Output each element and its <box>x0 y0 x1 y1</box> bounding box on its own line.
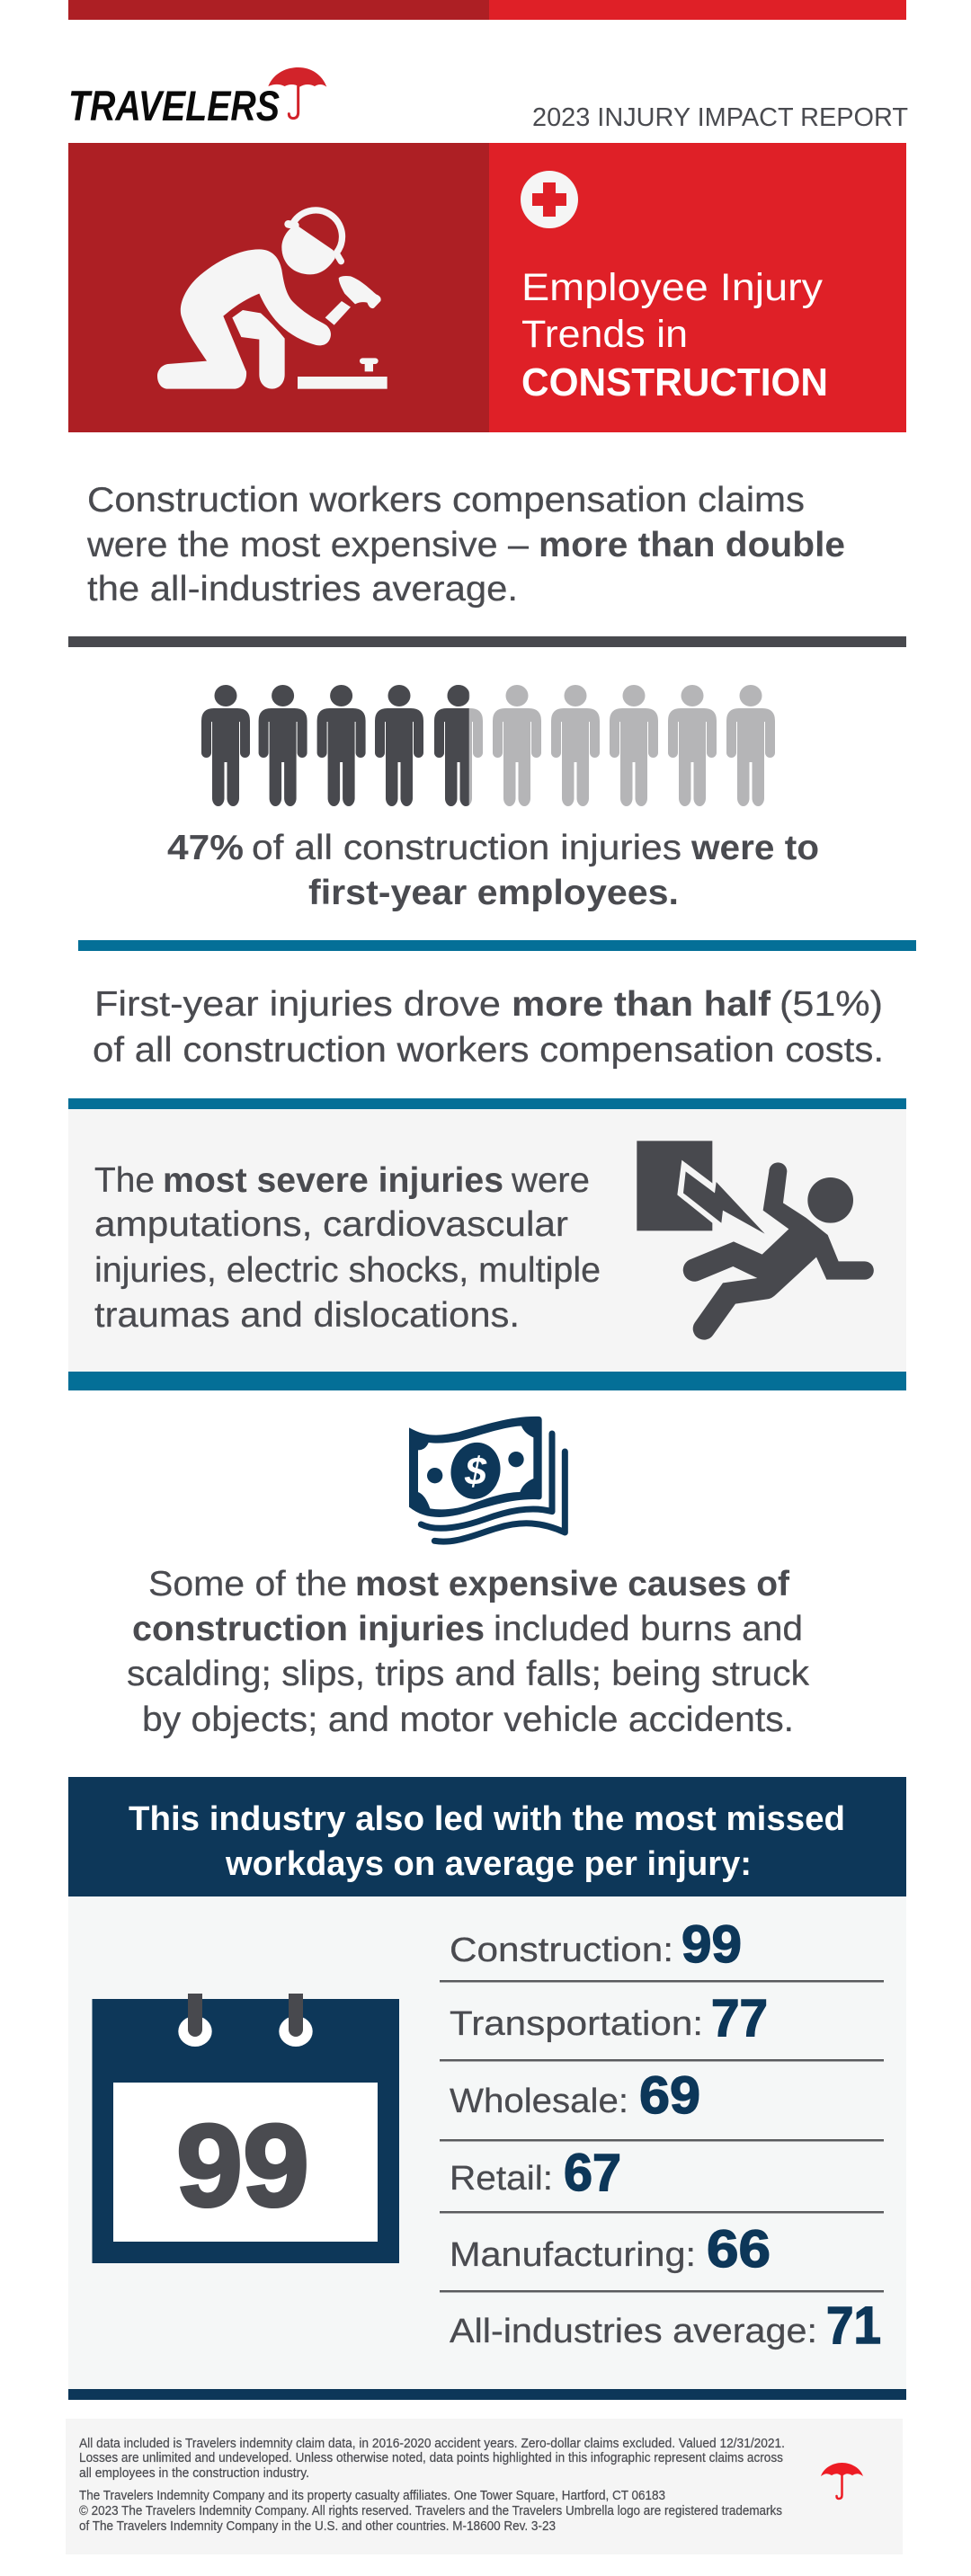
intro statement: more than double <box>539 526 845 564</box>
top colour band <box>68 0 906 20</box>
expensive causes text: construction injuries <box>132 1610 485 1648</box>
severe injuries text: amputations, cardiovascular <box>94 1205 568 1244</box>
statistic: compensation costs: more than half <box>512 985 771 1024</box>
statistic: compensation costs <box>93 985 884 1070</box>
row: Transportation: 77 <box>711 1989 768 2047</box>
severe injuries text: most severe injuries <box>163 1161 503 1200</box>
icon: stack of money <box>409 1417 565 1541</box>
footer disclaimer panel <box>66 2419 903 2554</box>
icon: calendar showing 99: 99 <box>176 2100 309 2231</box>
severe injuries text: were <box>511 1161 590 1200</box>
icon: electric shock fall <box>637 1141 874 1340</box>
header banner <box>68 143 906 432</box>
icon: calendar showing 99 <box>92 1994 399 2263</box>
row: Retail <box>450 2144 621 2202</box>
intro statement <box>86 481 845 608</box>
disclaimer text: all employees in the construction industry. <box>79 2466 309 2481</box>
severe injuries text: traumas and dislocations. <box>94 1296 520 1335</box>
statistic: compensation costs: First-year injuries drove <box>94 985 501 1024</box>
disclaimer text: The Travelers Indemnity Company and its property casualty affiliates. One Tower Square, Hartford, CT 06183 <box>79 2489 665 2503</box>
severe injuries text <box>94 1161 601 1335</box>
banner heading: CONSTRUCTION <box>521 360 828 404</box>
row: All-industries average <box>450 2296 881 2355</box>
severe injuries text: injuries, electric shocks, multiple <box>94 1251 601 1290</box>
row: Manufacturing: Manufacturing: <box>450 2236 696 2274</box>
intro statement: were the most expensive – <box>86 526 529 564</box>
expensive causes text: Some of the <box>148 1565 347 1603</box>
row: All-industries average: All-industries average: <box>450 2313 817 2350</box>
panel heading: missed workdays: workdays on average per injury: <box>225 1845 752 1883</box>
row: Wholesale: Wholesale: <box>450 2083 628 2120</box>
expensive causes text: scalding; slips, trips and falls; being struck <box>127 1655 810 1693</box>
row: Retail: 67 <box>564 2144 621 2202</box>
intro statement: the all-industries average. <box>87 570 518 608</box>
statistic: first-year injuries: 47% <box>167 829 244 867</box>
row: Construction <box>450 1915 742 1974</box>
disclaimer text: Losses are unlimited and undeveloped. Unless otherwise noted, data points highlighted in this infographic represent claims across <box>79 2451 783 2465</box>
statistic: first-year injuries <box>167 829 819 912</box>
row: Construction: 99 <box>681 1915 742 1974</box>
disclaimer text: All data included is Travelers indemnity claim data, in 2016-2020 accident years. Zero-dollar claims excluded. Valued 12/31/2021. <box>79 2437 785 2451</box>
expensive causes text: most expensive causes of <box>355 1565 790 1603</box>
panel: most severe injuries <box>68 1098 906 1390</box>
row: Construction: Construction: <box>450 1932 673 1969</box>
panel heading: missed workdays: This industry also led with the most missed <box>129 1800 845 1838</box>
disclaimer text: of The Travelers Indemnity Company in the U.S. and other countries. M-18600 Rev. 3-23 <box>79 2519 556 2534</box>
row: Wholesale: 69 <box>639 2066 700 2125</box>
banner heading: Employee Injury <box>521 266 824 309</box>
banner left panel <box>68 143 489 432</box>
statistic: compensation costs: of all construction workers compensation costs. <box>93 1031 884 1070</box>
row: Manufacturing: 66 <box>707 2220 771 2278</box>
row: Manufacturing <box>450 2220 771 2278</box>
row: Wholesale <box>450 2066 700 2125</box>
statistic: first-year injuries: of all construction injuries <box>252 829 681 867</box>
row: Retail: Retail: <box>450 2160 553 2198</box>
row: Transportation: Transportation: <box>450 2005 703 2043</box>
icon: construction worker hammering <box>157 210 388 389</box>
expensive causes text <box>127 1565 810 1739</box>
banner heading: Trends in <box>521 313 688 356</box>
expensive causes text: included burns and <box>494 1610 803 1648</box>
report title: 2023 INJURY IMPACT REPORT <box>532 103 908 132</box>
icon: medical cross <box>521 171 578 228</box>
panel: missed workdays data <box>68 1896 906 2400</box>
banner heading <box>521 266 828 404</box>
disclaimer text <box>79 2437 785 2534</box>
statistic: first-year injuries: were to <box>690 829 819 867</box>
statistic: first-year injuries: first-year employees. <box>308 874 679 912</box>
icon: red umbrella <box>821 2463 863 2499</box>
expensive causes text: by objects; and motor vehicle accidents. <box>142 1701 794 1739</box>
panel heading: missed workdays <box>68 1777 906 1896</box>
Travelers logo: TRAVELERS <box>68 82 280 129</box>
icon: stack of money: $ <box>464 1450 487 1493</box>
banner right panel <box>489 143 906 432</box>
severe injuries text: The <box>94 1161 155 1200</box>
row: All-industries average: 71 <box>826 2296 881 2355</box>
intro statement: Construction workers compensation claims <box>87 481 805 520</box>
disclaimer text: © 2023 The Travelers Indemnity Company. All rights reserved. Travelers and the Travelers Umbrella logo are registered trademarks <box>79 2504 782 2518</box>
people pictogram: 47 percent <box>201 685 775 806</box>
statistic: compensation costs: (51%) <box>779 985 883 1024</box>
row: Transportation <box>450 1989 768 2047</box>
